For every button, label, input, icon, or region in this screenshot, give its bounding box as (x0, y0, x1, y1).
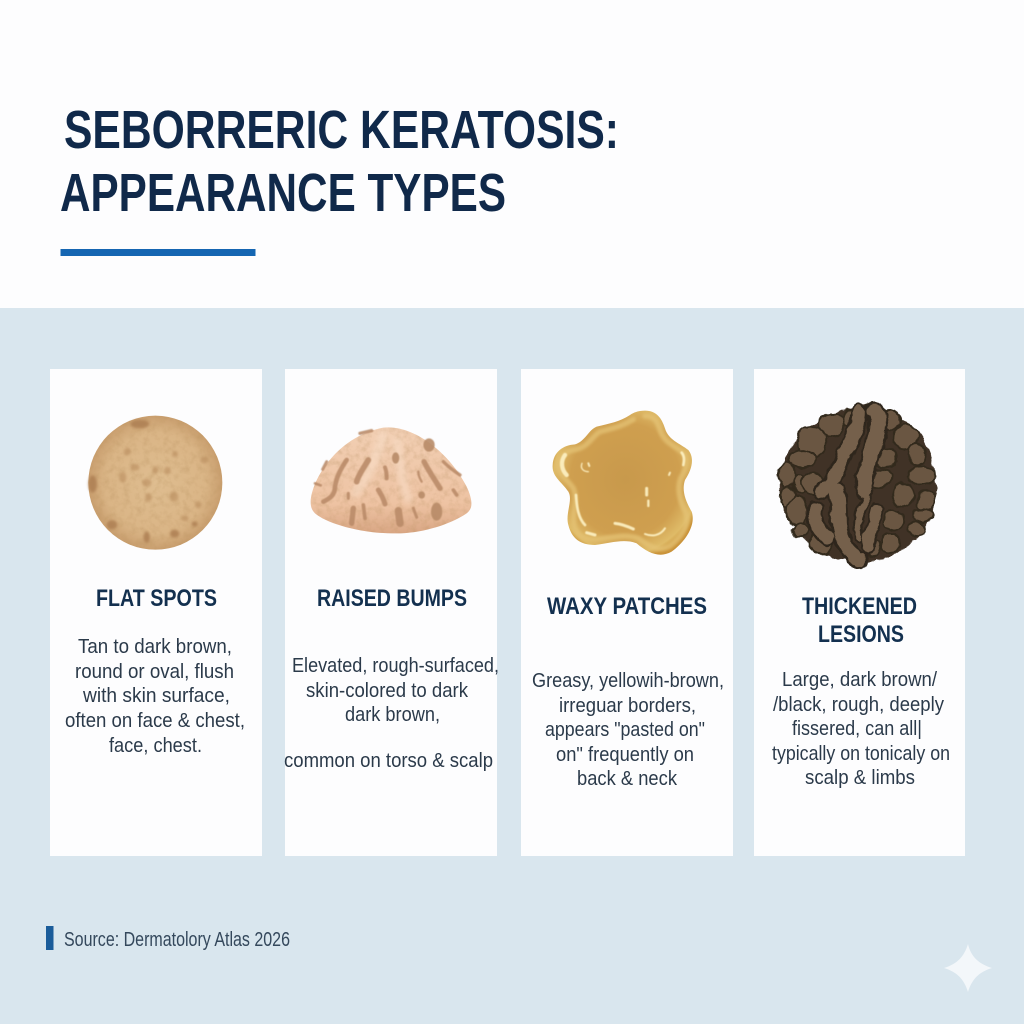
body text: thickened lesions: typically on tonicaly on (772, 742, 950, 765)
panel: flat spots (50, 369, 262, 856)
body text: flat spots: Tan to dark brown, (78, 635, 232, 658)
body text: raised bumps: common on torso & scalp (284, 749, 493, 772)
body text: thickened lesions: fissered, can all| (792, 717, 922, 740)
title (60, 100, 619, 223)
lower panel background (0, 308, 1024, 1024)
body text: waxy patches: appears "pasted on" (545, 718, 705, 741)
body text: flat spots (65, 635, 245, 757)
title underline (60, 249, 256, 256)
heading: thickened lesions: LESIONS (818, 621, 904, 648)
body text: waxy patches: Greasy, yellowih-brown, (532, 669, 724, 692)
icon: sparkle (944, 944, 992, 992)
panel: waxy patches (521, 369, 733, 856)
body text: raised bumps: dark brown, (345, 703, 440, 726)
body text: raised bumps: skin-colored to dark (306, 679, 469, 702)
body text: flat spots: with skin surface, (82, 684, 230, 707)
heading: thickened lesions (802, 593, 917, 648)
panel: raised bumps (284, 369, 499, 856)
body text: thickened lesions: scalp & limbs (805, 766, 915, 789)
body text: thickened lesions: /black, rough, deeply (773, 693, 945, 716)
body text: flat spots: face, chest. (109, 734, 202, 757)
body text: thickened lesions (772, 668, 950, 789)
body text: waxy patches: back & neck (577, 767, 678, 790)
title: SEBORRERIC KERATOSIS: (64, 100, 619, 160)
panel: thickened lesions (754, 369, 965, 856)
heading: thickened lesions: THICKENED (802, 593, 917, 620)
title: APPEARANCE TYPES (60, 163, 506, 223)
source text: Source: Dermatolory Atlas 2026 (64, 929, 290, 951)
body text: flat spots: round or oval, flush (75, 660, 234, 683)
icon: flat tan spot (88, 416, 222, 550)
source marker (46, 926, 54, 950)
heading: flat spots: FLAT SPOTS (96, 585, 217, 612)
body text: raised bumps: Elevated, rough-surfaced, (292, 654, 499, 677)
heading: waxy patches: WAXY PATCHES (547, 593, 707, 620)
body text: waxy patches (532, 669, 724, 790)
icon: waxy patch (553, 411, 693, 555)
heading: raised bumps: RAISED BUMPS (317, 585, 467, 612)
body text: thickened lesions: Large, dark brown/ (782, 668, 937, 691)
header background (0, 0, 1024, 308)
body text: raised bumps (284, 654, 499, 772)
icon: thickened lesion (778, 404, 936, 563)
icon: raised bump (311, 427, 471, 533)
body text: waxy patches: on" frequently on (556, 743, 694, 766)
body text: flat spots: often on face & chest, (65, 709, 245, 732)
body text: waxy patches: irreguar borders, (559, 694, 696, 717)
